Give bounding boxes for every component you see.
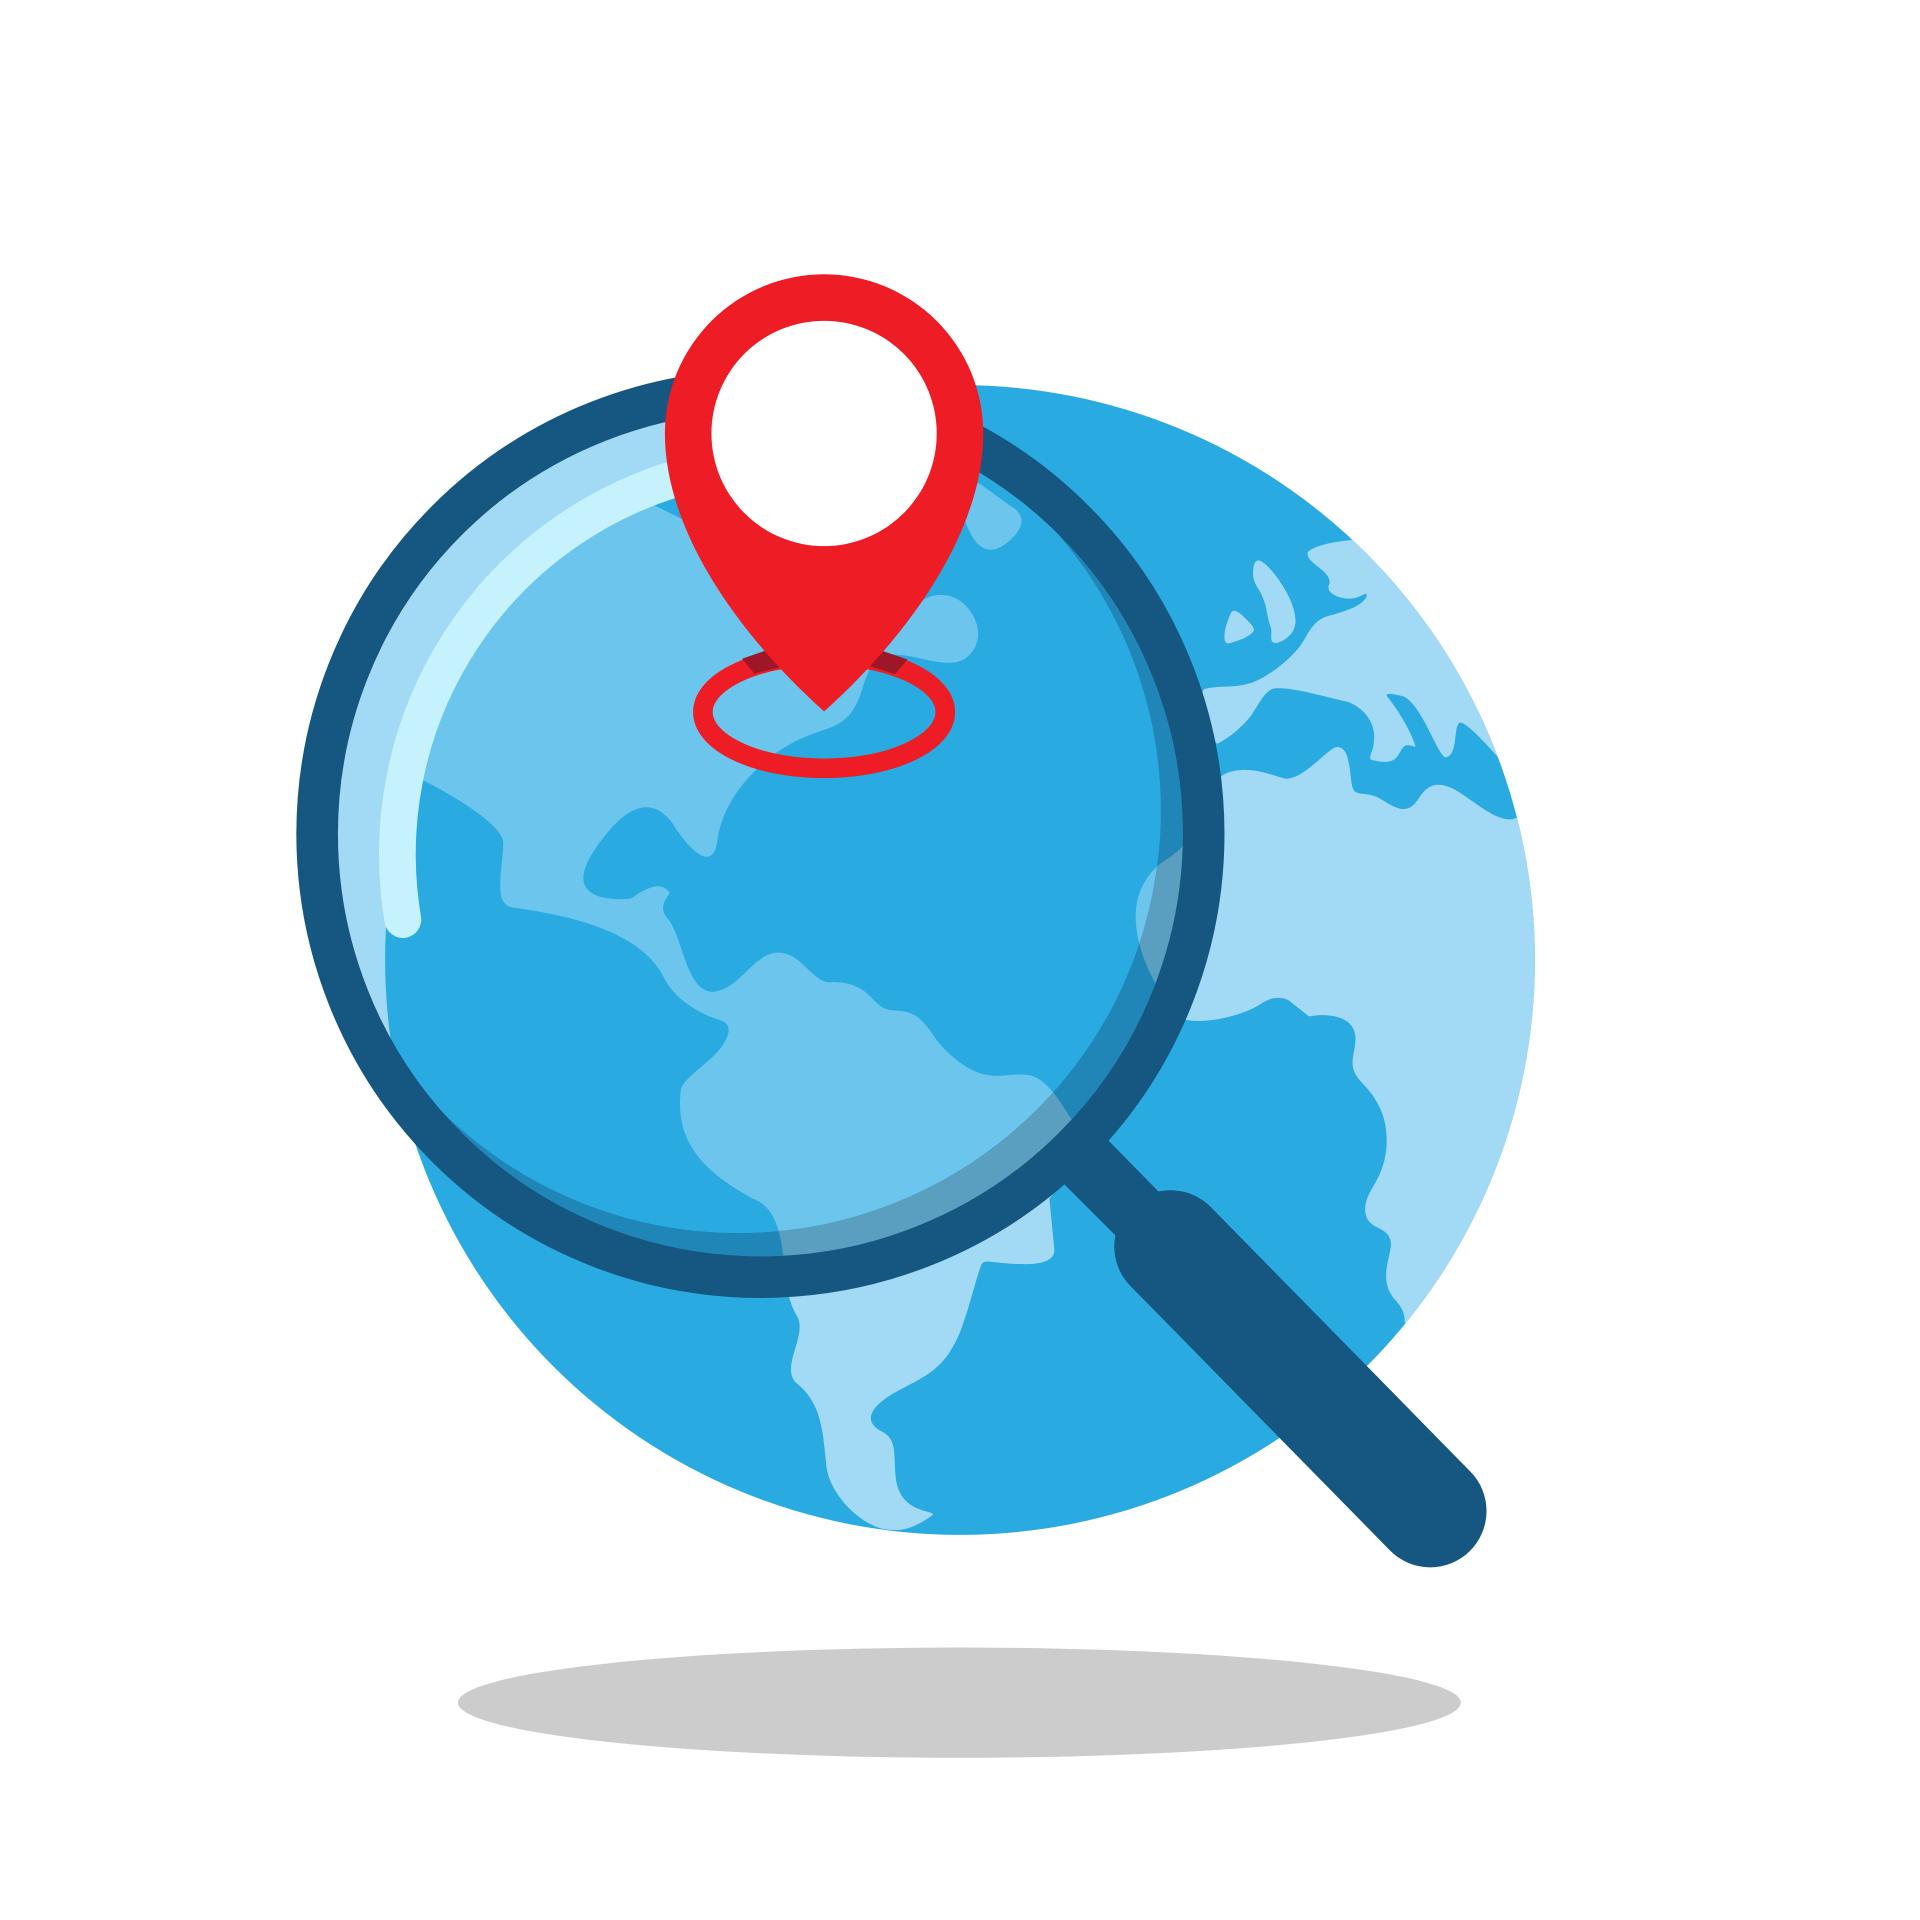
magnifier handle <box>1051 1128 1430 1511</box>
globe <box>367 385 1592 1535</box>
magnifier ring <box>317 391 1204 1277</box>
illustration: magnifier over globe with location pin <box>296 274 1535 1758</box>
magnifier lens <box>338 422 1183 1256</box>
location ring on map <box>703 650 945 768</box>
ground shadow <box>458 1648 1461 1758</box>
lens inner shade <box>444 534 1183 1256</box>
location pin <box>665 274 983 711</box>
lens highlight arc <box>397 473 698 920</box>
